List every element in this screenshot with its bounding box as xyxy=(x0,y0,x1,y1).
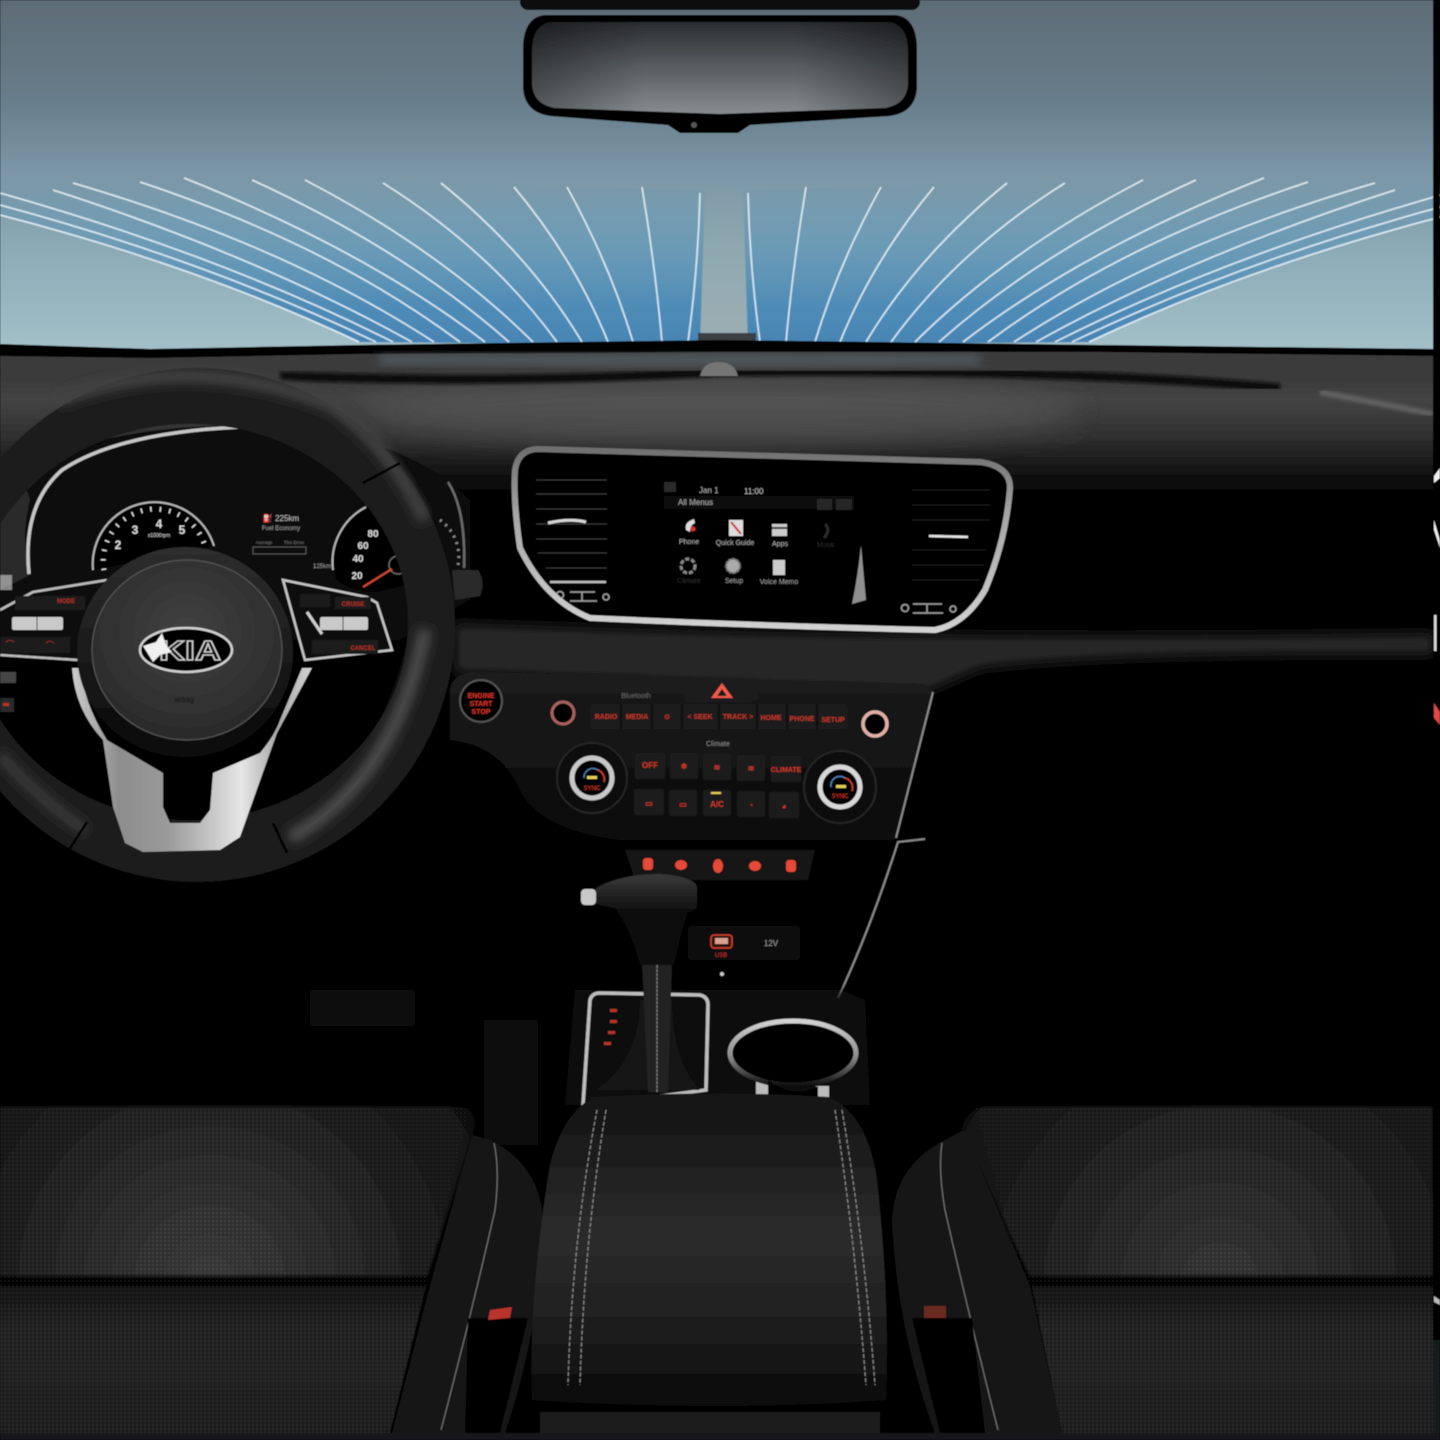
left spoke: ⌒ xyxy=(45,641,55,651)
kia badge xyxy=(140,628,232,672)
cup holder xyxy=(730,1021,856,1100)
climate label: Climate xyxy=(706,741,730,748)
app: music: Music xyxy=(817,542,836,549)
tachometer: 3 xyxy=(132,523,139,537)
lcd info display xyxy=(226,510,331,590)
console trim xyxy=(838,839,925,998)
climate buttons xyxy=(634,753,802,818)
binnacle left surround xyxy=(0,469,30,590)
hazard button xyxy=(684,681,759,702)
tachometer: 4 xyxy=(156,517,163,531)
right spoke: CRUISE xyxy=(342,602,364,608)
wheel rim xyxy=(0,368,455,882)
rim lower right highlight xyxy=(290,630,425,838)
audio button row: SETUP xyxy=(821,717,845,724)
buckle xyxy=(912,1318,985,1433)
climate buttons: ◔ xyxy=(749,801,754,810)
airbag hub xyxy=(77,547,293,757)
rim lower left highlight xyxy=(0,755,85,830)
app: climate: Climate xyxy=(677,578,701,585)
dash sensor bump xyxy=(700,362,738,376)
volume knob xyxy=(552,702,574,724)
stitching xyxy=(568,1110,875,1385)
left air vent xyxy=(528,462,612,586)
gear gate frame xyxy=(583,993,708,1105)
binnacle silver arc xyxy=(28,427,242,574)
armrest xyxy=(531,1094,887,1433)
app: phone xyxy=(679,519,699,546)
rim upper highlight xyxy=(60,376,425,520)
speedometer: 80 xyxy=(367,529,379,540)
tachometer xyxy=(93,502,214,570)
bluetooth label: Bluetooth xyxy=(621,693,651,700)
audio button row: PHONE xyxy=(790,716,815,723)
audio button row: MEDIA xyxy=(626,714,648,721)
road centre strip xyxy=(698,190,752,340)
centre stack panel xyxy=(450,672,933,880)
usb and switch panel xyxy=(688,926,800,976)
left spoke: ⌒ xyxy=(5,640,15,650)
climate buttons: ◕ xyxy=(782,802,787,811)
gear stem xyxy=(612,905,690,965)
usb and switch panel: 12V xyxy=(764,939,779,948)
left side switches xyxy=(0,672,16,712)
vent controls xyxy=(556,592,956,613)
app: quick guide xyxy=(716,520,754,547)
dash crest highlight xyxy=(1320,392,1433,414)
floor mat xyxy=(484,1020,538,1145)
app: quick guide: Quick Guide xyxy=(716,540,754,547)
windshield xyxy=(0,0,1440,350)
climate buttons: ▭ xyxy=(679,800,687,809)
speedometer: 20 xyxy=(351,571,363,582)
dash crease xyxy=(280,371,1280,388)
seat grain xyxy=(0,1107,470,1433)
app: climate xyxy=(677,559,701,585)
gear console xyxy=(581,874,800,1105)
app: music xyxy=(817,524,836,549)
right pocket tag xyxy=(924,1306,946,1318)
windshield base line xyxy=(0,340,1433,358)
right seat xyxy=(892,1107,1433,1433)
gear shaft xyxy=(642,962,672,1092)
right air vent xyxy=(906,474,997,596)
left sensor field xyxy=(0,165,705,345)
rear view mirror mount xyxy=(520,0,920,10)
seat back lower xyxy=(1032,1286,1433,1433)
audio button row xyxy=(590,704,848,729)
left climate knob xyxy=(557,743,627,813)
climate buttons: ≋ xyxy=(714,763,721,772)
silver bottom spoke xyxy=(72,668,312,852)
lcd info display: ⛽ 225km xyxy=(263,513,299,523)
right climate knob: SYNC xyxy=(832,794,849,800)
gear knob silver tip xyxy=(581,889,596,905)
seat back upper xyxy=(0,1107,475,1276)
usb and switch panel: USB xyxy=(715,953,727,959)
status bar: Jan 1 xyxy=(699,486,719,495)
lcd info display: Average xyxy=(256,540,273,545)
start stop button: STOP xyxy=(472,709,491,716)
dashboard band xyxy=(455,624,1433,690)
seat back lower xyxy=(0,1286,426,1433)
climate buttons: OFF xyxy=(642,761,658,770)
dark wiper housing xyxy=(698,333,756,347)
climate buttons: CLIMATE xyxy=(771,767,802,774)
tachometer: x1000rpm xyxy=(148,533,170,539)
steering column stalk xyxy=(452,570,483,600)
left spoke xyxy=(0,580,107,660)
tachometer: 2 xyxy=(115,538,122,552)
armrest base xyxy=(540,1412,880,1433)
start stop button: ENGINE xyxy=(468,693,495,700)
left climate knob: SYNC xyxy=(584,786,601,792)
left spoke: MODE xyxy=(57,599,75,605)
audio button row: HOME xyxy=(760,715,782,722)
left pocket tag xyxy=(488,1307,512,1320)
seat back upper xyxy=(962,1107,1433,1276)
app: apps xyxy=(772,524,788,548)
audio button row: TRACK > xyxy=(723,714,753,721)
stitching xyxy=(941,1143,998,1430)
console floor xyxy=(565,990,870,1105)
start stop button: START xyxy=(470,701,493,708)
audio button row: ⊙ xyxy=(664,714,670,721)
menu title: All Menus xyxy=(678,498,713,507)
climate buttons: ❄ xyxy=(681,762,688,771)
lcd info display: 125km xyxy=(313,564,331,570)
audio button row: < SEEK xyxy=(687,714,713,721)
seat grain xyxy=(975,1107,1433,1433)
climate buttons: ≋ xyxy=(748,764,755,773)
rear view mirror xyxy=(523,15,917,133)
right climate knob xyxy=(804,751,876,823)
gear knob xyxy=(596,874,697,912)
app: voice memo: Voice Memo xyxy=(760,579,798,586)
climate buttons: A/C xyxy=(710,800,724,809)
tachometer: 5 xyxy=(179,523,186,537)
buckle xyxy=(465,1318,528,1433)
right spoke xyxy=(283,580,392,660)
centre dash glow xyxy=(360,378,1080,446)
left stalk switches xyxy=(0,575,12,590)
app: apps: Apps xyxy=(772,541,788,548)
rim seams xyxy=(67,463,400,853)
left seat xyxy=(0,1107,543,1433)
tune knob xyxy=(863,712,887,736)
kia badge: KIA xyxy=(159,635,221,666)
infotainment screen xyxy=(660,480,868,604)
bolster xyxy=(892,1130,1062,1433)
climate buttons: ▭ xyxy=(645,799,653,808)
start stop button xyxy=(460,680,502,722)
display surround xyxy=(515,449,1010,630)
fuel gauge xyxy=(440,520,459,565)
pedal xyxy=(310,990,415,1026)
dashboard top xyxy=(0,340,1433,490)
lcd info display: Fuel Economy xyxy=(262,526,300,532)
app: setup xyxy=(725,559,743,585)
silver trim ring xyxy=(515,449,1010,630)
gear gate markers xyxy=(604,1009,617,1045)
airbag hub: airbag xyxy=(174,697,194,704)
speedometer: 60 xyxy=(357,541,369,552)
steering wheel xyxy=(0,368,455,882)
right sensor field xyxy=(743,165,1440,345)
seat heater button row xyxy=(625,850,815,880)
instrument cluster xyxy=(0,425,470,640)
speedometer xyxy=(332,507,420,592)
gear boot xyxy=(596,1000,700,1090)
app: voice memo xyxy=(760,560,798,586)
app: setup: Setup xyxy=(725,578,743,585)
bolster xyxy=(392,1135,543,1433)
lcd info display: This Drive xyxy=(284,540,305,545)
stitching xyxy=(441,1143,497,1430)
windshield reflection xyxy=(380,355,980,364)
right spoke: CANCEL xyxy=(350,646,376,652)
audio button row: RADIO xyxy=(595,714,618,721)
infotainment screen: 11:00 xyxy=(744,487,764,496)
speedometer: 40 xyxy=(352,554,364,565)
app: phone: Phone xyxy=(679,539,699,546)
